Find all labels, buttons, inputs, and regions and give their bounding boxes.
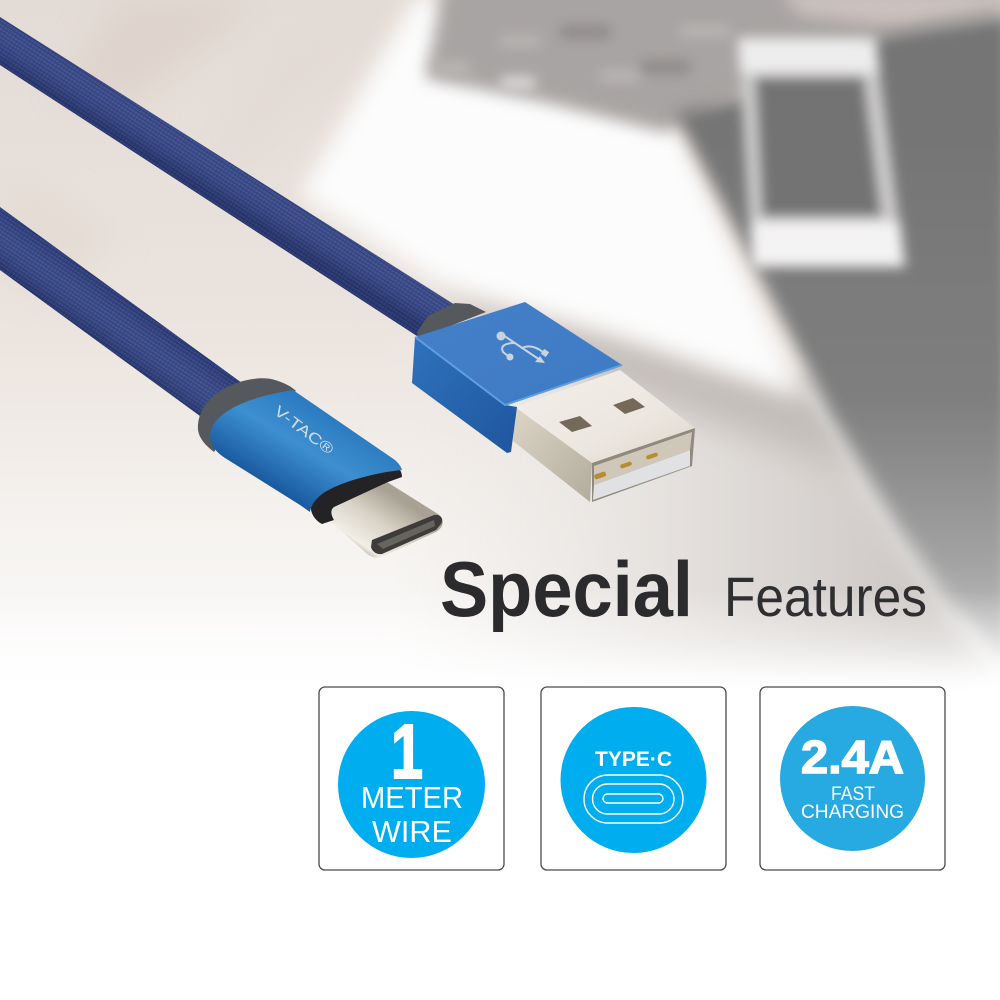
USB-A silver plug <box>513 370 695 502</box>
USB-A cable <box>0 17 455 336</box>
panel: type-c <box>541 687 726 870</box>
title <box>440 545 927 633</box>
background: light streak beside dark surface <box>805 375 960 615</box>
text: CHARGING: CHARGING <box>801 802 904 823</box>
background: dark laptop surface <box>675 15 1000 670</box>
background: top right warm band <box>780 0 1000 28</box>
background: white palm rest <box>300 0 800 395</box>
USB-C grey boot <box>198 378 296 452</box>
USB-C black collar <box>311 462 402 524</box>
USB-C silver plug <box>328 482 443 557</box>
USB-A grey boot <box>417 303 486 345</box>
text: METER: METER <box>361 781 463 815</box>
USB-C connector <box>198 378 443 557</box>
title: Special: Special <box>440 545 693 633</box>
panel: 2.4A fast charging <box>760 687 945 870</box>
background: wood streaks <box>0 0 380 300</box>
background: shadow of laptop edge <box>430 290 860 470</box>
text: TYPE-C: TYPE·C <box>595 747 672 771</box>
background: keyboard <box>425 0 1000 132</box>
USB-A blue housing <box>412 302 622 453</box>
text: FAST: FAST <box>831 784 875 805</box>
USB-C cable <box>0 207 242 416</box>
text: 2.4A: 2.4A <box>801 731 904 783</box>
text: 1: 1 <box>391 709 423 795</box>
title: Features: Features <box>724 565 927 628</box>
background: keyboard key highlights <box>435 25 730 90</box>
V-TAC logo: V-TAC® <box>271 403 337 458</box>
icon: USB symbol <box>496 332 549 363</box>
background: lower surface shading <box>380 320 1000 680</box>
icon: type-c port <box>584 775 683 823</box>
USB-A holes <box>559 416 592 432</box>
USB-A connector <box>412 302 695 502</box>
background: phone <box>738 38 905 267</box>
background: fade to white <box>0 590 1000 692</box>
panel: 1 meter wire <box>319 687 504 870</box>
text: WIRE: WIRE <box>372 815 452 849</box>
USB-C blue body <box>210 390 402 512</box>
